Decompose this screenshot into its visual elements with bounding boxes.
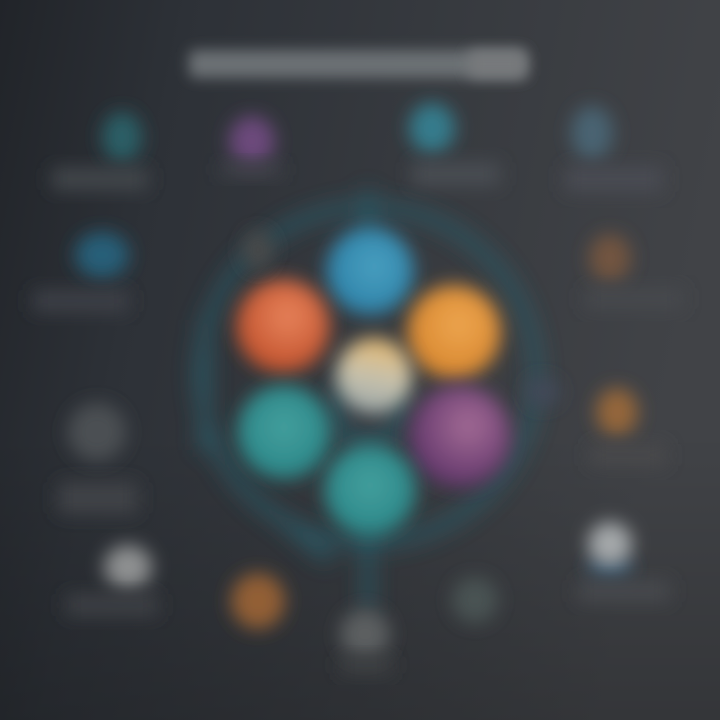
- node: purple: [409, 385, 511, 487]
- item: bottom orange: [231, 573, 285, 629]
- node: red orange: [236, 279, 330, 373]
- item: bottom left white: [66, 545, 158, 616]
- item: top cyan: [409, 103, 500, 186]
- node: cream centre: [336, 338, 412, 414]
- item: bottom centre grey: [340, 609, 392, 674]
- item: left blue: [33, 232, 129, 312]
- node: blue: [326, 227, 414, 315]
- central cluster: [236, 227, 511, 536]
- node: teal bottom: [324, 444, 416, 536]
- item: right orange: [585, 234, 683, 309]
- node: amber orange: [407, 285, 501, 379]
- network connector lines: [200, 190, 536, 610]
- item: bottom green grey: [452, 577, 498, 623]
- item: top purple: [220, 116, 282, 177]
- small node upper left of cluster: [243, 230, 273, 270]
- item: top teal: [52, 112, 148, 190]
- title: [189, 50, 527, 78]
- item: bottom right white: [578, 522, 670, 602]
- node: teal left: [237, 385, 331, 479]
- item: top blue grey: [565, 106, 663, 192]
- item: left grey: [58, 403, 138, 514]
- small node right of cluster: [526, 378, 560, 406]
- item: right orange lower: [590, 388, 666, 466]
